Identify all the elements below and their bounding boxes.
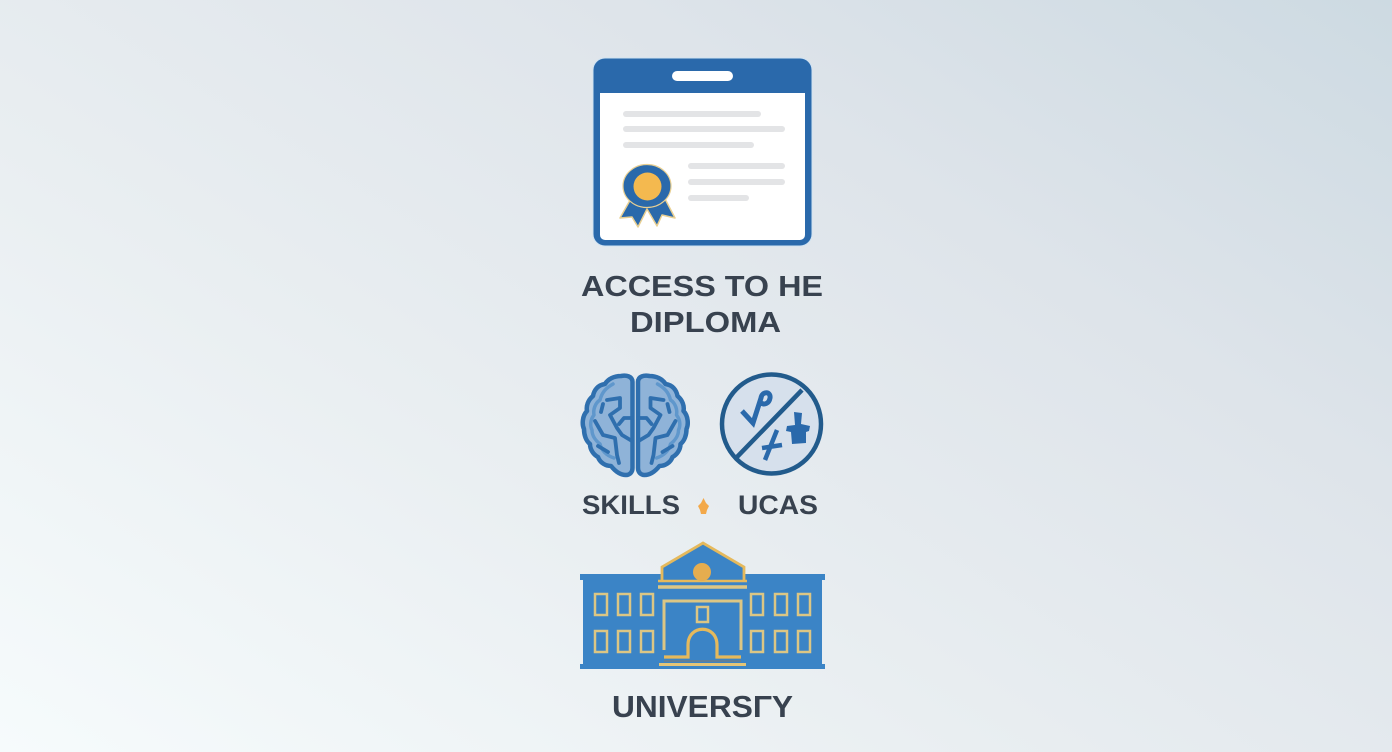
left hemisphere <box>583 376 632 475</box>
heading: Access to HE Diploma: DIPLOMA <box>630 307 781 339</box>
icon: diploma certificate <box>593 58 812 246</box>
icon: small orange marker <box>698 498 709 514</box>
label: University: UNIVERSΓY <box>612 689 793 724</box>
label: Skills: SKILLS <box>582 490 680 520</box>
icon: ribbon seal <box>620 164 675 227</box>
heading: Access to HE Diploma <box>581 271 823 339</box>
right hemisphere <box>638 376 688 475</box>
icon: university building <box>580 543 825 669</box>
heading: Access to HE Diploma: ACCESS TO HE <box>581 271 823 303</box>
icon: maths symbols circle <box>722 374 821 474</box>
label: UCAS: UCAS <box>738 490 818 520</box>
entrance <box>664 601 741 650</box>
windows <box>595 594 810 652</box>
icon: brain <box>583 376 688 475</box>
